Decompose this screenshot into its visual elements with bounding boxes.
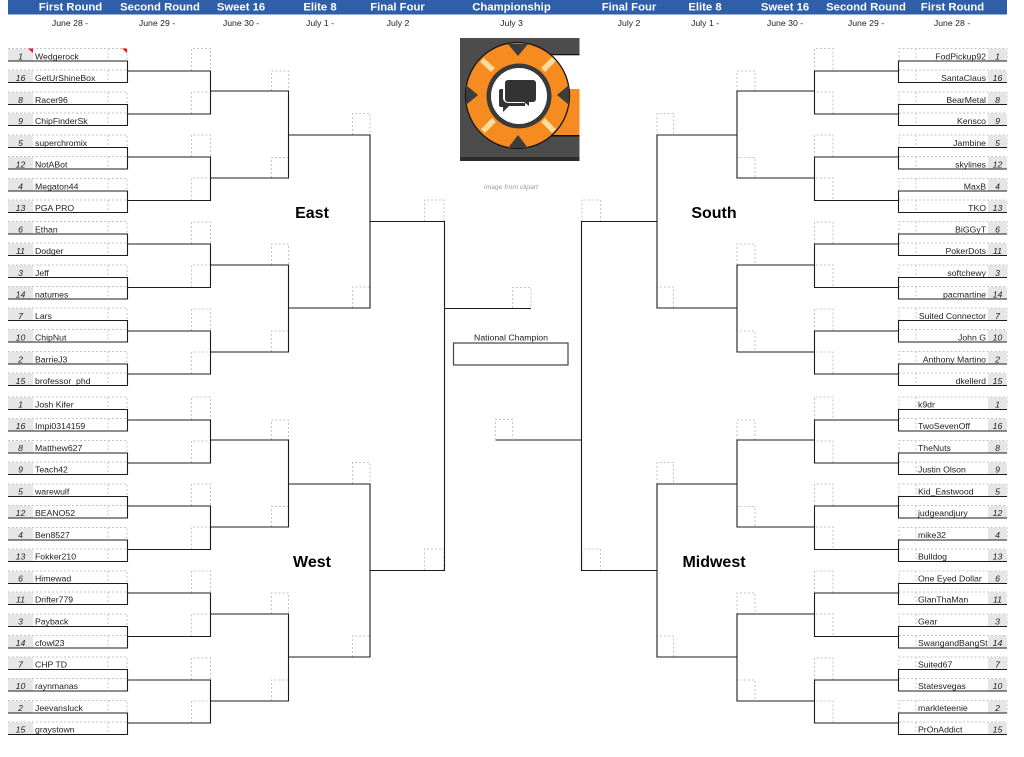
entry: Kid_Eastwood [899, 484, 1007, 497]
header bar: Elite 8 [688, 2, 722, 14]
entry: warewulf: 5 [18, 487, 23, 497]
entry: Kensco [899, 113, 1007, 126]
entry: BarrieJ3: BarrieJ3 [35, 354, 68, 364]
entry: PokerDots: PokerDots [945, 246, 987, 256]
entry: CHP TD: 7 [18, 660, 24, 670]
entry: Racer96: 8 [18, 95, 23, 105]
entry: ChipNut: ChipNut [35, 332, 67, 342]
entry: Suited Connector: 7 [995, 311, 1001, 321]
entry: Statesvegas [899, 678, 1007, 691]
entry: BarrieJ3: 2 [17, 354, 23, 364]
entry: Impi0314159: Impi0314159 [35, 421, 85, 431]
entry: k9dr: 1 [995, 400, 1000, 410]
entry: natumes [8, 286, 127, 299]
entry: Dodger: 11 [16, 246, 25, 256]
entry: TwoSevenOff: TwoSevenOff [918, 421, 971, 431]
entry: Josh Kifer: 1 [18, 400, 23, 410]
entry: Jambine: 5 [995, 138, 1000, 148]
entry: warewulf [8, 484, 127, 497]
entry: One Eyed Dollar [899, 571, 1007, 584]
entry: Jeff: Jeff [35, 268, 49, 278]
entry: Jambine [899, 135, 1007, 148]
entry: softchewy: softchewy [947, 268, 987, 278]
entry: cfowl23: 14 [16, 638, 25, 648]
entry: NotABot [8, 156, 127, 169]
entry: Kid_Eastwood: Kid_Eastwood [918, 487, 974, 497]
national champion box [454, 332, 568, 365]
entry: Lars: Lars [35, 311, 53, 321]
entry: NotABot: NotABot [35, 159, 68, 169]
entry: superchromix: 5 [18, 138, 23, 148]
entry: Ethan: Ethan [35, 224, 58, 234]
entry: John G: 10 [993, 332, 1002, 342]
entry: warewulf: warewulf [34, 487, 70, 497]
entry: PrOnAddict: PrOnAddict [918, 725, 963, 735]
entry: PrOnAddict [899, 722, 1007, 735]
entry: MaxB: 4 [995, 181, 1000, 191]
entry: Justin Olson [899, 462, 1007, 475]
entry: dkellerd [899, 373, 1007, 386]
entry: Wedgerock [8, 48, 127, 61]
entry: Matthew627: 8 [18, 443, 23, 453]
bracket lines: West [8, 410, 370, 734]
entry: raynmanas: 10 [16, 681, 25, 691]
entry: Gear [899, 614, 1007, 627]
entry: Impi0314159 [8, 418, 127, 431]
entry: Suited67 [899, 657, 1007, 670]
entry: Bulldog: Bulldog [918, 552, 947, 562]
entry: k9dr [899, 397, 1007, 410]
entry: PrOnAddict: 15 [993, 725, 1002, 735]
panel: South bracket entries [899, 48, 1007, 386]
entry: brofessor_phd: 15 [16, 376, 25, 386]
bracket lines: Midwest [657, 410, 1007, 734]
entry: Jambine: Jambine [953, 138, 986, 148]
round dates: July 2 [618, 18, 641, 28]
entry: Jeff [8, 265, 127, 278]
header bar: Sweet 16 [761, 2, 809, 14]
entry: Jeevansluck: 2 [17, 703, 23, 713]
header bar: Second Round [826, 2, 906, 14]
entry: SantaClaus: 16 [993, 73, 1002, 83]
entry: natumes: 14 [16, 289, 25, 299]
entry: raynmanas: raynmanas [35, 681, 79, 691]
entry: Drifter779 [8, 592, 127, 605]
entry: Matthew627 [8, 440, 127, 453]
entry: Justin Olson: 9 [995, 465, 1000, 475]
entry: Gear: Gear [918, 617, 937, 627]
entry: dkellerd: 15 [993, 376, 1002, 386]
entry: graystown [8, 722, 127, 735]
bracket lines: Final Four to Championship [370, 222, 657, 570]
entry: Ethan: 6 [18, 224, 23, 234]
entry: SantaClaus [899, 70, 1007, 83]
panel: East bracket entries [8, 48, 127, 386]
entry: judgeandjury: 12 [993, 508, 1002, 518]
entry: TwoSevenOff [899, 418, 1007, 431]
entry: Josh Kifer [8, 397, 127, 410]
entry: Racer96 [8, 92, 127, 105]
entry: Jeevansluck: Jeevansluck [35, 703, 83, 713]
round dates: June 29 - [848, 18, 884, 28]
entry: Jeevansluck [8, 700, 127, 713]
bracket lines: South [657, 61, 1007, 386]
entry: Josh Kifer: Josh Kifer [35, 400, 74, 410]
entry: Jeff: 3 [18, 268, 23, 278]
entry: Lars: 7 [18, 311, 24, 321]
entry: Kid_Eastwood: 5 [995, 487, 1000, 497]
entry: Gear: 3 [995, 617, 1000, 627]
region label: South: South [691, 205, 737, 222]
entry: BearMetal: BearMetal [946, 95, 986, 105]
round dates: June 28 - [52, 18, 88, 28]
entry: Megaton44: Megaton44 [35, 181, 79, 191]
entry: Kensco: Kensco [957, 116, 986, 126]
entry: Wedgerock: Wedgerock [35, 51, 79, 61]
entry: mike32: 4 [995, 530, 1000, 540]
entry: markleteenie: markleteenie [918, 703, 968, 713]
entry: Fokker210: 13 [16, 552, 25, 562]
entry: Fokker210 [8, 549, 127, 562]
header bar: First Round [921, 2, 984, 14]
entry: markleteenie [899, 700, 1007, 713]
entry: FodPickup92: 1 [995, 51, 1000, 61]
entry: PGA PRO [8, 200, 127, 213]
entry: SwangandBangStr: 14 [993, 638, 1002, 648]
round dates: June 30 - [767, 18, 803, 28]
icon: poker chip with speech bubbles [460, 38, 580, 161]
entry: judgeandjury: judgeandjury [917, 508, 968, 518]
entry: Lars [8, 308, 127, 321]
panel: West bracket entries [8, 397, 127, 735]
round dates: June 29 - [139, 18, 175, 28]
header bar: Championship [472, 2, 551, 14]
entry: GlanThaMan: GlanThaMan [918, 595, 968, 605]
entry: BiGGyT [899, 222, 1007, 234]
entry: Bulldog [899, 549, 1007, 562]
entry: FodPickup92: FodPickup92 [935, 51, 986, 61]
header bar: Second Round [120, 2, 200, 14]
entry: PGA PRO: 13 [16, 203, 25, 213]
entry: Suited Connector: Suited Connector [919, 311, 986, 321]
entry: Matthew627: Matthew627 [35, 443, 82, 453]
entry: Payback: 3 [18, 617, 23, 627]
entry: graystown: graystown [35, 725, 75, 735]
entry: BearMetal [899, 92, 1007, 105]
entry: GlanThaMan [899, 592, 1007, 605]
entry: GlanThaMan: 11 [993, 595, 1002, 605]
entry: BEANO52 [8, 506, 127, 518]
entry: John G [899, 330, 1007, 342]
entry: Megaton44: 4 [18, 181, 23, 191]
header bar [8, 0, 1007, 14]
entry: MaxB: MaxB [964, 181, 986, 191]
region label: Midwest: Midwest [682, 554, 746, 571]
entry: BEANO52: 12 [16, 508, 25, 518]
entry: NotABot: 12 [16, 159, 25, 169]
entry: Himewad: Himewad [35, 574, 71, 584]
entry: BiGGyT: BiGGyT [955, 224, 987, 234]
entry: TKO: TKO [968, 203, 986, 213]
entry: softchewy: 3 [995, 268, 1000, 278]
entry: John G: John G [958, 332, 986, 342]
entry: TheNuts [899, 440, 1007, 453]
entry: natumes: natumes [35, 289, 69, 299]
entry: One Eyed Dollar: One Eyed Dollar [918, 574, 982, 584]
entry: PokerDots [899, 243, 1007, 256]
entry: SantaClaus: SantaClaus [941, 73, 987, 83]
entry: TKO: 13 [993, 203, 1002, 213]
header bar: Final Four [602, 2, 657, 14]
entry: skylines [899, 156, 1007, 169]
entry: superchromix [8, 135, 127, 148]
entry: TKO [899, 200, 1007, 213]
entry: PGA PRO: PGA PRO [35, 203, 74, 213]
region label: West: West [293, 554, 332, 571]
entry: Drifter779: Drifter779 [35, 595, 73, 605]
entry: GetUrShineBox: GetUrShineBox [35, 73, 96, 83]
header bar: First Round [39, 2, 102, 14]
entry: Ben8527: 4 [18, 530, 23, 540]
entry: Ethan [8, 222, 127, 234]
bracket lines: East [8, 61, 370, 386]
entry: TheNuts: TheNuts [918, 443, 951, 453]
entry: Drifter779: 11 [16, 595, 25, 605]
entry: Teach42: 9 [18, 465, 23, 475]
entry: MaxB [899, 178, 1007, 191]
entry: dkellerd: dkellerd [956, 376, 986, 386]
entry: Wedgerock: 1 [18, 51, 23, 61]
entry: Himewad [8, 571, 127, 584]
entry: Teach42 [8, 462, 127, 475]
entry: superchromix: superchromix [35, 138, 88, 148]
entry: SwangandBangStr: SwangandBangStr [918, 638, 991, 648]
entry: skylines: 12 [993, 159, 1002, 169]
region label: East: East [295, 205, 330, 222]
entry: FodPickup92 [899, 48, 1007, 61]
entry: CHP TD: CHP TD [35, 660, 67, 670]
header bar: Elite 8 [303, 2, 337, 14]
entry: Kensco: 9 [995, 116, 1000, 126]
entry: mike32: mike32 [918, 530, 946, 540]
entry: Teach42: Teach42 [35, 465, 68, 475]
entry: Impi0314159: 16 [16, 421, 25, 431]
entry: Ben8527: Ben8527 [35, 530, 70, 540]
image credit: image from clipart [484, 184, 539, 191]
entry: graystown: 15 [16, 725, 25, 735]
entry: raynmanas [8, 678, 127, 691]
round dates: July 2 [387, 18, 410, 28]
entry: Anthony Martino: 2 [994, 354, 1000, 364]
entry: Ben8527 [8, 528, 127, 540]
entry: mike32 [899, 528, 1007, 540]
entry: brofessor_phd [8, 373, 127, 386]
empty pick boxes, right half [582, 48, 833, 723]
entry: Suited67: Suited67 [918, 660, 952, 670]
entry: Payback: Payback [35, 617, 69, 627]
round dates [52, 18, 970, 28]
entry: cfowl23: cfowl23 [35, 638, 65, 648]
entry: ChipNut [8, 330, 127, 342]
entry: Dodger [8, 243, 127, 256]
entry: Megaton44 [8, 178, 127, 191]
entry: cfowl23 [8, 636, 127, 648]
entry: Dodger: Dodger [35, 246, 64, 256]
entry: Suited Connector [899, 308, 1007, 321]
entry: BiGGyT: 6 [995, 224, 1000, 234]
entry: TwoSevenOff: 16 [993, 421, 1002, 431]
entry: Fokker210: Fokker210 [35, 552, 76, 562]
entry: pacmartine: 14 [993, 289, 1002, 299]
entry: GetUrShineBox [8, 70, 127, 83]
empty pick boxes, left half [192, 48, 444, 723]
entry: brofessor_phd: brofessor_phd [35, 376, 91, 386]
entry: Statesvegas: Statesvegas [918, 681, 966, 691]
entry: Justin Olson: Justin Olson [918, 465, 966, 475]
entry: Racer96: Racer96 [35, 95, 68, 105]
entry: Suited67: 7 [995, 660, 1001, 670]
entry: pacmartine: pacmartine [943, 289, 986, 299]
national champion box: National Champion [474, 332, 548, 342]
round dates: June 30 - [223, 18, 259, 28]
entry: k9dr: k9dr [918, 400, 935, 410]
entry: ChipFinderSk: 9 [18, 116, 23, 126]
entry: Bulldog: 13 [993, 552, 1002, 562]
header bar: Final Four [370, 2, 425, 14]
entry: One Eyed Dollar: 6 [995, 574, 1000, 584]
entry: CHP TD [8, 657, 127, 670]
entry: markleteenie: 2 [994, 703, 1000, 713]
entry: PokerDots: 11 [993, 246, 1002, 256]
entry: skylines: skylines [955, 159, 987, 169]
entry: softchewy [899, 265, 1007, 278]
entry: BEANO52: BEANO52 [35, 508, 75, 518]
round dates: July 3 [500, 18, 523, 28]
entry: judgeandjury [899, 506, 1007, 518]
entry: ChipNut: 10 [16, 332, 25, 342]
round dates: July 1 - [306, 18, 334, 28]
entry: ChipFinderSk: ChipFinderSk [35, 116, 88, 126]
entry: Anthony Martino [899, 352, 1007, 364]
entry: ChipFinderSk [8, 113, 127, 126]
entry: BearMetal: 8 [995, 95, 1000, 105]
entry: BarrieJ3 [8, 352, 127, 364]
header bar: Sweet 16 [217, 2, 265, 14]
championship pick boxes [496, 288, 531, 440]
entry: GetUrShineBox: 16 [16, 73, 25, 83]
round dates: July 1 - [691, 18, 719, 28]
entry: SwangandBangStr [899, 636, 1007, 648]
entry: Himewad: 6 [18, 574, 23, 584]
entry: Payback [8, 614, 127, 627]
round dates: June 28 - [934, 18, 970, 28]
entry: Anthony Martino: Anthony Martino [923, 354, 986, 364]
panel: Midwest bracket entries [899, 397, 1007, 735]
entry: Statesvegas: 10 [993, 681, 1002, 691]
entry: TheNuts: 8 [995, 443, 1000, 453]
entry: pacmartine [899, 286, 1007, 299]
